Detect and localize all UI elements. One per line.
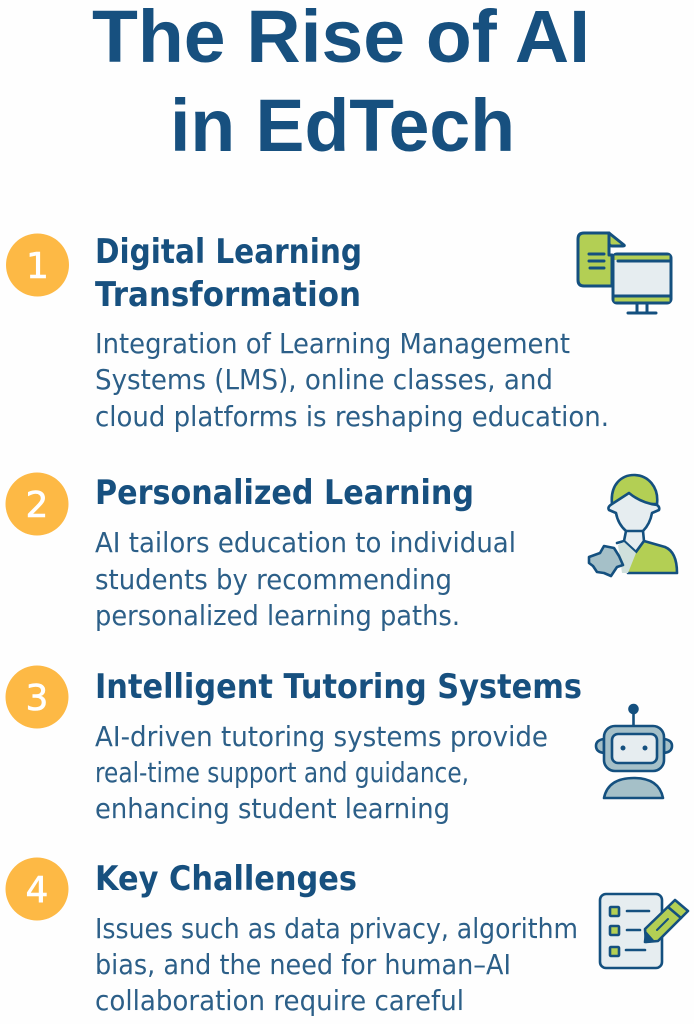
number badge 4: 4 (26, 870, 48, 911)
heading: intelligent tutoring systems: Intelligent Tutoring Systems (95, 667, 582, 707)
icon: robot (596, 705, 672, 798)
text: digital learning description (95, 327, 609, 433)
text: digital learning description: Systems (LMS), online classes, and (95, 363, 553, 396)
text: intelligent tutoring description: real-time support and guidance, (95, 756, 469, 789)
heading: digital learning transformation (95, 232, 362, 315)
panel: key challenges (6, 858, 688, 1017)
text: digital learning description: cloud platforms is reshaping education. (95, 400, 609, 433)
panel: intelligent tutoring systems (6, 666, 672, 825)
number badge 1 (6, 234, 69, 296)
text: personalized learning description: personalized learning paths. (95, 599, 460, 632)
number badge 3 (6, 666, 68, 728)
title (92, 0, 590, 167)
text: key challenges description (95, 912, 578, 1017)
number badge 2: 2 (26, 485, 48, 526)
panel: personalized learning (6, 472, 677, 632)
number badge 3: 3 (26, 678, 48, 719)
heading: digital learning transformation: Transformation (95, 275, 361, 315)
text: personalized learning description: students by recommending (95, 563, 452, 596)
number badge 2 (6, 472, 68, 536)
icon: document and monitor (578, 233, 671, 313)
text: key challenges description: Issues such as data privacy, algorithm (95, 912, 578, 945)
text: digital learning description: Integration of Learning Management (95, 327, 570, 360)
text: key challenges description: collaboration require careful (95, 984, 464, 1017)
text: intelligent tutoring description (95, 720, 548, 825)
heading: personalized learning: Personalized Learning (95, 473, 474, 513)
text: intelligent tutoring description: AI-driven tutoring systems provide (95, 720, 548, 753)
heading: key challenges: Key Challenges (95, 859, 357, 899)
icon: checklist and pencil (600, 894, 688, 968)
number badge 1: 1 (26, 246, 49, 287)
text: personalized learning description: AI tailors education to individual (95, 526, 516, 559)
heading: digital learning transformation: Digital Learning (95, 232, 362, 272)
number badge 4 (6, 858, 68, 920)
text: key challenges description: bias, and the need for human–AI (95, 948, 511, 981)
icon: student (589, 475, 677, 576)
text: intelligent tutoring description: enhancing student learning (95, 792, 450, 825)
panel: digital learning transformation (6, 232, 671, 433)
text: personalized learning description (95, 526, 516, 632)
title: in EdTech (170, 84, 515, 167)
